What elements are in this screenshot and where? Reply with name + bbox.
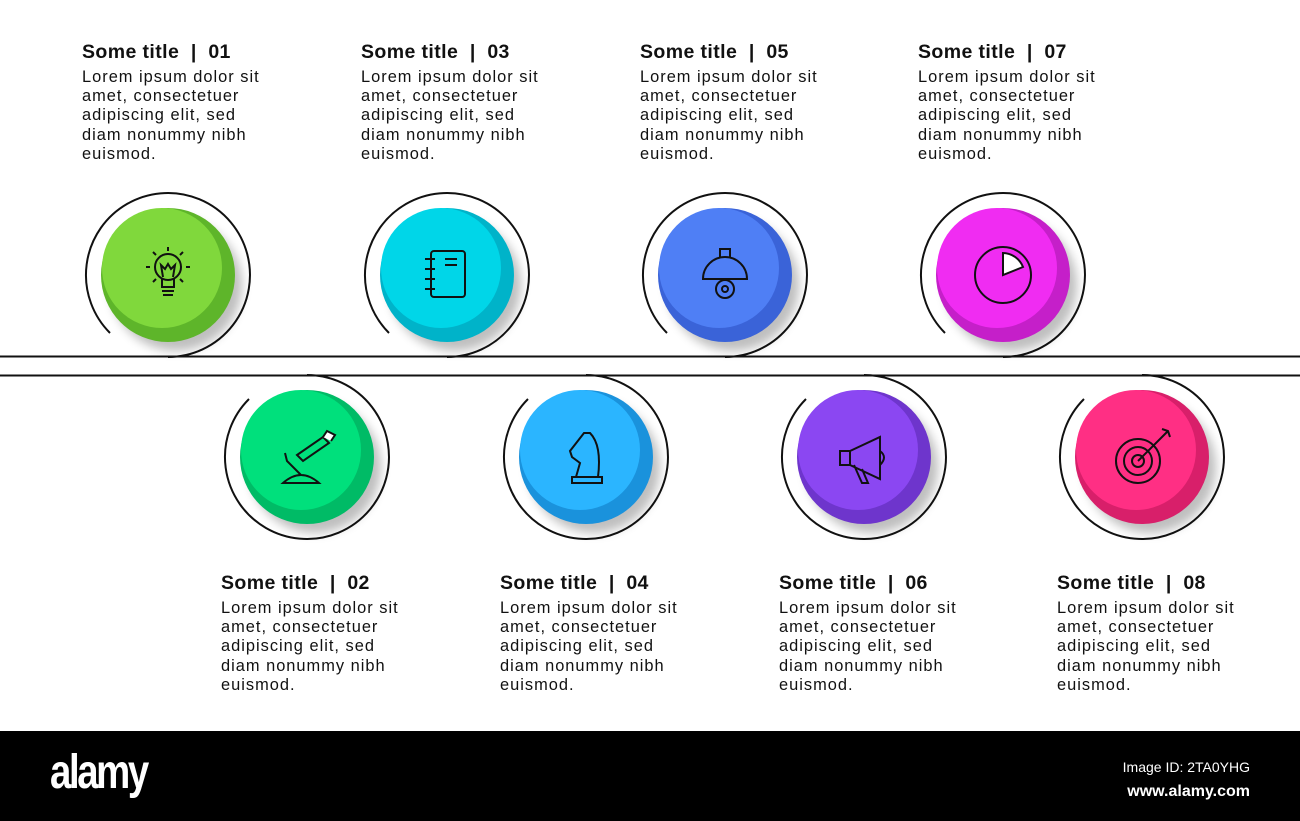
text: step 01: Some title | 01 (82, 41, 231, 63)
text: step 02: euismod. (221, 676, 296, 694)
text: step 08: diam nonummy nibh (1057, 657, 1222, 675)
footer logo: alamy (50, 746, 147, 799)
footer id: www.alamy.com (1127, 783, 1250, 800)
step 04 (504, 375, 668, 539)
text: step 02 (221, 572, 399, 694)
step 03 (365, 193, 529, 357)
text: step 03: adipiscing elit, sed (361, 106, 515, 124)
text: step 05: amet, consectetuer (640, 87, 797, 105)
text: step 07: adipiscing elit, sed (918, 106, 1072, 124)
text: step 07: amet, consectetuer (918, 87, 1075, 105)
text: step 06: diam nonummy nibh (779, 657, 944, 675)
text: step 06 (779, 572, 957, 694)
footer id: Image ID: 2TA0YHG (1123, 759, 1250, 775)
step 08 (1060, 375, 1224, 539)
text: step 06: adipiscing elit, sed (779, 637, 933, 655)
text: step 03 (361, 41, 539, 163)
text: step 01: amet, consectetuer (82, 87, 239, 105)
text: step 06: euismod. (779, 676, 854, 694)
text: step 07 (918, 41, 1096, 163)
text: step 04: Some title | 04 (500, 572, 649, 594)
text: step 01: euismod. (82, 145, 157, 163)
text: step 08: Some title | 08 (1057, 572, 1206, 594)
step 01 (86, 193, 250, 357)
text: step 03: euismod. (361, 145, 436, 163)
text: step 05: euismod. (640, 145, 715, 163)
text: step 02: Some title | 02 (221, 572, 370, 594)
text: step 07: Lorem ipsum dolor sit (918, 68, 1096, 86)
text: step 01: adipiscing elit, sed (82, 106, 236, 124)
text: step 04: Lorem ipsum dolor sit (500, 599, 678, 617)
text: step 03: amet, consectetuer (361, 87, 518, 105)
text: step 02: adipiscing elit, sed (221, 637, 375, 655)
text: step 01: Lorem ipsum dolor sit (82, 68, 260, 86)
text: step 03: Lorem ipsum dolor sit (361, 68, 539, 86)
text: step 08 (1057, 572, 1235, 694)
text: step 07: Some title | 07 (918, 41, 1067, 63)
step 06 (782, 375, 946, 539)
text: step 04: adipiscing elit, sed (500, 637, 654, 655)
text: step 06: amet, consectetuer (779, 618, 936, 636)
text: step 03: diam nonummy nibh (361, 126, 526, 144)
text: step 01: diam nonummy nibh (82, 126, 247, 144)
text: step 05: adipiscing elit, sed (640, 106, 794, 124)
text: step 05: diam nonummy nibh (640, 126, 805, 144)
text: step 01 (82, 41, 260, 163)
text: step 08: amet, consectetuer (1057, 618, 1214, 636)
text: step 08: euismod. (1057, 676, 1132, 694)
text: step 02: diam nonummy nibh (221, 657, 386, 675)
text: step 04 (500, 572, 678, 694)
text: step 05 (640, 41, 818, 163)
text: step 04: diam nonummy nibh (500, 657, 665, 675)
footer band (0, 731, 1300, 821)
timeline lines (0, 356, 1300, 376)
text: step 07: euismod. (918, 145, 993, 163)
text: step 08: Lorem ipsum dolor sit (1057, 599, 1235, 617)
text: step 02: Lorem ipsum dolor sit (221, 599, 399, 617)
text: step 06: Some title | 06 (779, 572, 928, 594)
footer id (1123, 759, 1250, 800)
text: step 04: euismod. (500, 676, 575, 694)
step 05 (643, 193, 807, 357)
text: step 07: diam nonummy nibh (918, 126, 1083, 144)
text: step 04: amet, consectetuer (500, 618, 657, 636)
text: step 02: amet, consectetuer (221, 618, 378, 636)
text: step 08: adipiscing elit, sed (1057, 637, 1211, 655)
step 07 (921, 193, 1085, 357)
step 02 (225, 375, 389, 539)
text: step 06: Lorem ipsum dolor sit (779, 599, 957, 617)
text: step 05: Lorem ipsum dolor sit (640, 68, 818, 86)
text: step 03: Some title | 03 (361, 41, 510, 63)
text: step 05: Some title | 05 (640, 41, 789, 63)
